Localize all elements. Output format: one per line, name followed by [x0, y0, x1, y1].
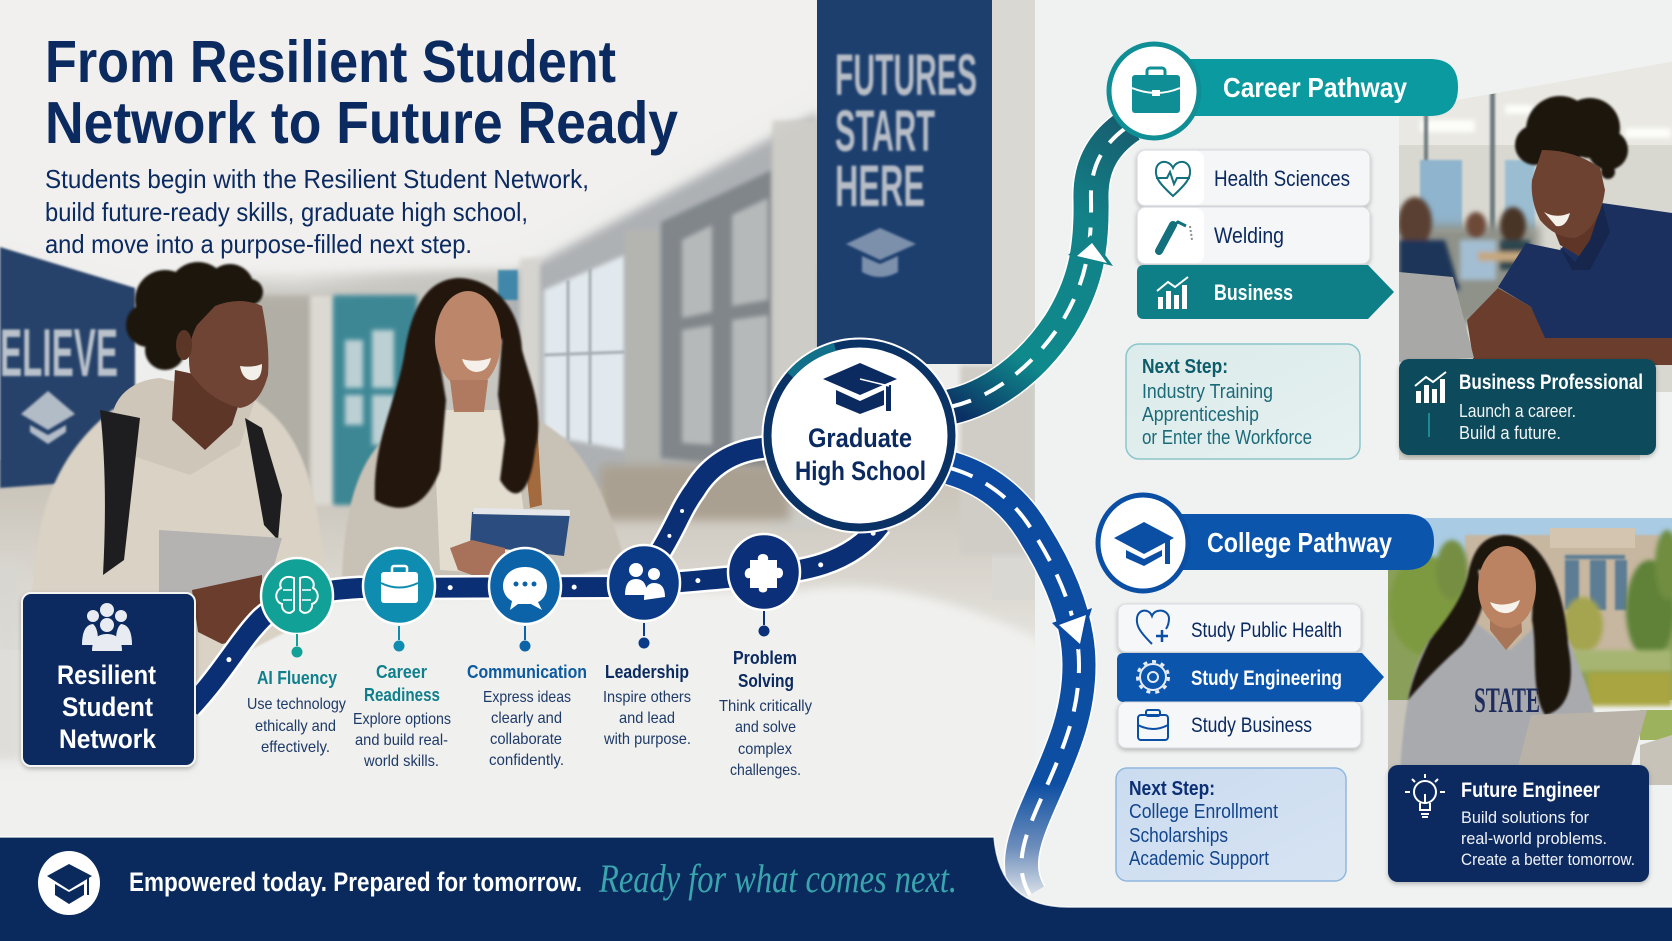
college pathway header: College Pathway [1207, 527, 1392, 558]
skill: Communication: collaborate [490, 731, 562, 748]
Business Professional card: Build a future. [1459, 423, 1561, 443]
subtitle: Students begin with the Resilient Student Network, [45, 164, 589, 194]
graduate high school node: High School [795, 456, 926, 486]
career next step box: Industry Training [1142, 381, 1273, 403]
right panel background [1035, 0, 1672, 910]
man in navy polo [1498, 203, 1672, 342]
option: Study Engineering (selected): Study Engineering [1191, 667, 1342, 690]
skill: Leadership [603, 545, 691, 748]
skill: Career Readiness: Readiness [364, 685, 440, 705]
photo: female student [342, 278, 626, 582]
skill: Communication: Express ideas [483, 689, 571, 706]
left blue banner [0, 247, 135, 488]
college road with arrow [950, 468, 1092, 895]
Business Professional card: Launch a career. [1459, 401, 1576, 421]
icon: career briefcase [1109, 44, 1199, 138]
skill: Problem Solving: Think critically [719, 698, 812, 715]
skill: Communication: clearly and [491, 710, 562, 727]
Future Engineer card [1388, 765, 1649, 882]
skill: Problem Solving: challenges. [730, 762, 801, 779]
skill: Career Readiness: and build real- [355, 732, 448, 749]
blue FUTURES START HERE banner: START [835, 99, 935, 164]
career next step box: or Enter the Workforce [1142, 427, 1312, 449]
skill: Career Readiness: world skills. [363, 753, 439, 770]
skill: AI Fluency: ethically and [255, 718, 336, 735]
title: From Resilient Student [45, 29, 616, 95]
photo: male student [32, 262, 330, 720]
title: Network to Future Ready [45, 90, 678, 156]
skill: Communication: confidently. [489, 752, 564, 769]
icon: footer graduation cap [38, 851, 100, 915]
soft white lower-left background [0, 586, 1040, 845]
option: Study Public Health [1118, 604, 1361, 652]
Future Engineer card: Create a better tomorrow. [1461, 850, 1635, 869]
curly hair [126, 262, 263, 370]
skill: Communication: Communication [467, 662, 587, 682]
Future Engineer card: real-world problems. [1461, 829, 1607, 848]
footer tagline: Empowered today. Prepared for tomorrow. [129, 867, 582, 897]
icon: graduation cap [823, 363, 897, 414]
icon: briefcase [363, 548, 435, 652]
option: Business (selected): Business [1214, 280, 1293, 305]
blue FUTURES START HERE banner: HERE [835, 154, 925, 219]
icon: student group [82, 603, 132, 651]
skill: Problem Solving: Solving [738, 671, 794, 691]
skill: Problem Solving: and solve [735, 719, 796, 736]
skill: Leadership: and lead [619, 710, 675, 727]
subtitle: and move into a purpose-filled next step. [45, 229, 472, 259]
career next step box: Next Step: [1142, 356, 1228, 378]
career next step box [1126, 344, 1360, 459]
career road with arrow [950, 125, 1130, 407]
skill: AI Fluency [247, 558, 346, 756]
option: Business (selected) [1137, 265, 1394, 319]
career pathway header [1109, 44, 1458, 138]
skill: Leadership: with purpose. [603, 731, 691, 748]
photo: college student on campus [1388, 518, 1672, 785]
skill: Problem Solving: Problem [733, 648, 797, 668]
panel: Resilient Student Network: Resilient [57, 660, 156, 690]
option: Health Sciences [1137, 150, 1370, 206]
woman in grey hoodie [1400, 623, 1596, 765]
footer script tagline: Ready for what comes next. [598, 856, 957, 901]
Future Engineer card: Future Engineer [1461, 779, 1600, 802]
left blue banner: ELIEVE [0, 315, 118, 391]
panel: college pathway [1098, 495, 1649, 882]
photo: career student at laptop [1398, 60, 1672, 460]
college next step box: Next Step: [1129, 778, 1215, 800]
skill: Problem Solving: complex [738, 741, 792, 758]
option: Study Public Health: Study Public Health [1191, 619, 1342, 642]
option: Study Engineering (selected) [1117, 653, 1384, 702]
skill: Problem Solving [719, 534, 812, 779]
college next step box [1116, 768, 1346, 881]
option: Welding: Welding [1214, 223, 1284, 248]
subtitle [45, 164, 589, 259]
skill: AI Fluency: effectively. [261, 739, 330, 756]
blue FUTURES START HERE banner: FUTURES [835, 43, 977, 108]
panel: Resilient Student Network: Student [62, 692, 153, 722]
Future Engineer card: Build solutions for [1461, 808, 1589, 827]
college next step box: College Enrollment [1129, 801, 1278, 823]
background hallway photo [0, 0, 1035, 650]
option: Study Business [1118, 702, 1361, 748]
skill: AI Fluency: Use technology [247, 696, 346, 713]
option: Welding [1137, 207, 1370, 264]
skill: Career Readiness [353, 548, 451, 770]
skill: Leadership: Leadership [605, 662, 689, 682]
college pathway header [1098, 495, 1434, 591]
footer navy band [0, 837, 1672, 941]
option: Study Business: Study Business [1191, 714, 1312, 737]
graduate high school node: Graduate [808, 423, 912, 453]
career pathway header: Career Pathway [1223, 72, 1407, 103]
college next step box: Scholarships [1129, 825, 1228, 847]
skill: Leadership: Inspire others [603, 689, 691, 706]
icon: people [608, 545, 680, 648]
icon: light bulb [1405, 774, 1445, 817]
icon: brain [261, 558, 333, 658]
title [45, 29, 678, 156]
icon: puzzle piece [728, 534, 800, 636]
college next step box: Academic Support [1129, 848, 1269, 870]
panel: Resilient Student Network [22, 593, 195, 766]
main road: skills path [190, 447, 880, 708]
panel: career pathway [1109, 44, 1656, 459]
icon: college graduation cap [1098, 495, 1188, 591]
blue FUTURES START HERE banner [817, 0, 992, 364]
subtitle: build future-ready skills, graduate high school, [45, 197, 528, 227]
skill: Career Readiness: Career [376, 662, 427, 682]
graduate high school node [762, 338, 958, 534]
skill: AI Fluency: AI Fluency [257, 668, 337, 688]
photo: college student on campus: STATE [1474, 680, 1540, 720]
option: Health Sciences: Health Sciences [1214, 166, 1350, 191]
skill: Communication [467, 548, 587, 769]
skill: Career Readiness: Explore options [353, 711, 451, 728]
Business Professional card [1399, 359, 1656, 455]
career next step box: Apprenticeship [1142, 404, 1259, 426]
icon: speech bubbles [489, 548, 561, 652]
panel: Resilient Student Network: Network [59, 724, 157, 754]
